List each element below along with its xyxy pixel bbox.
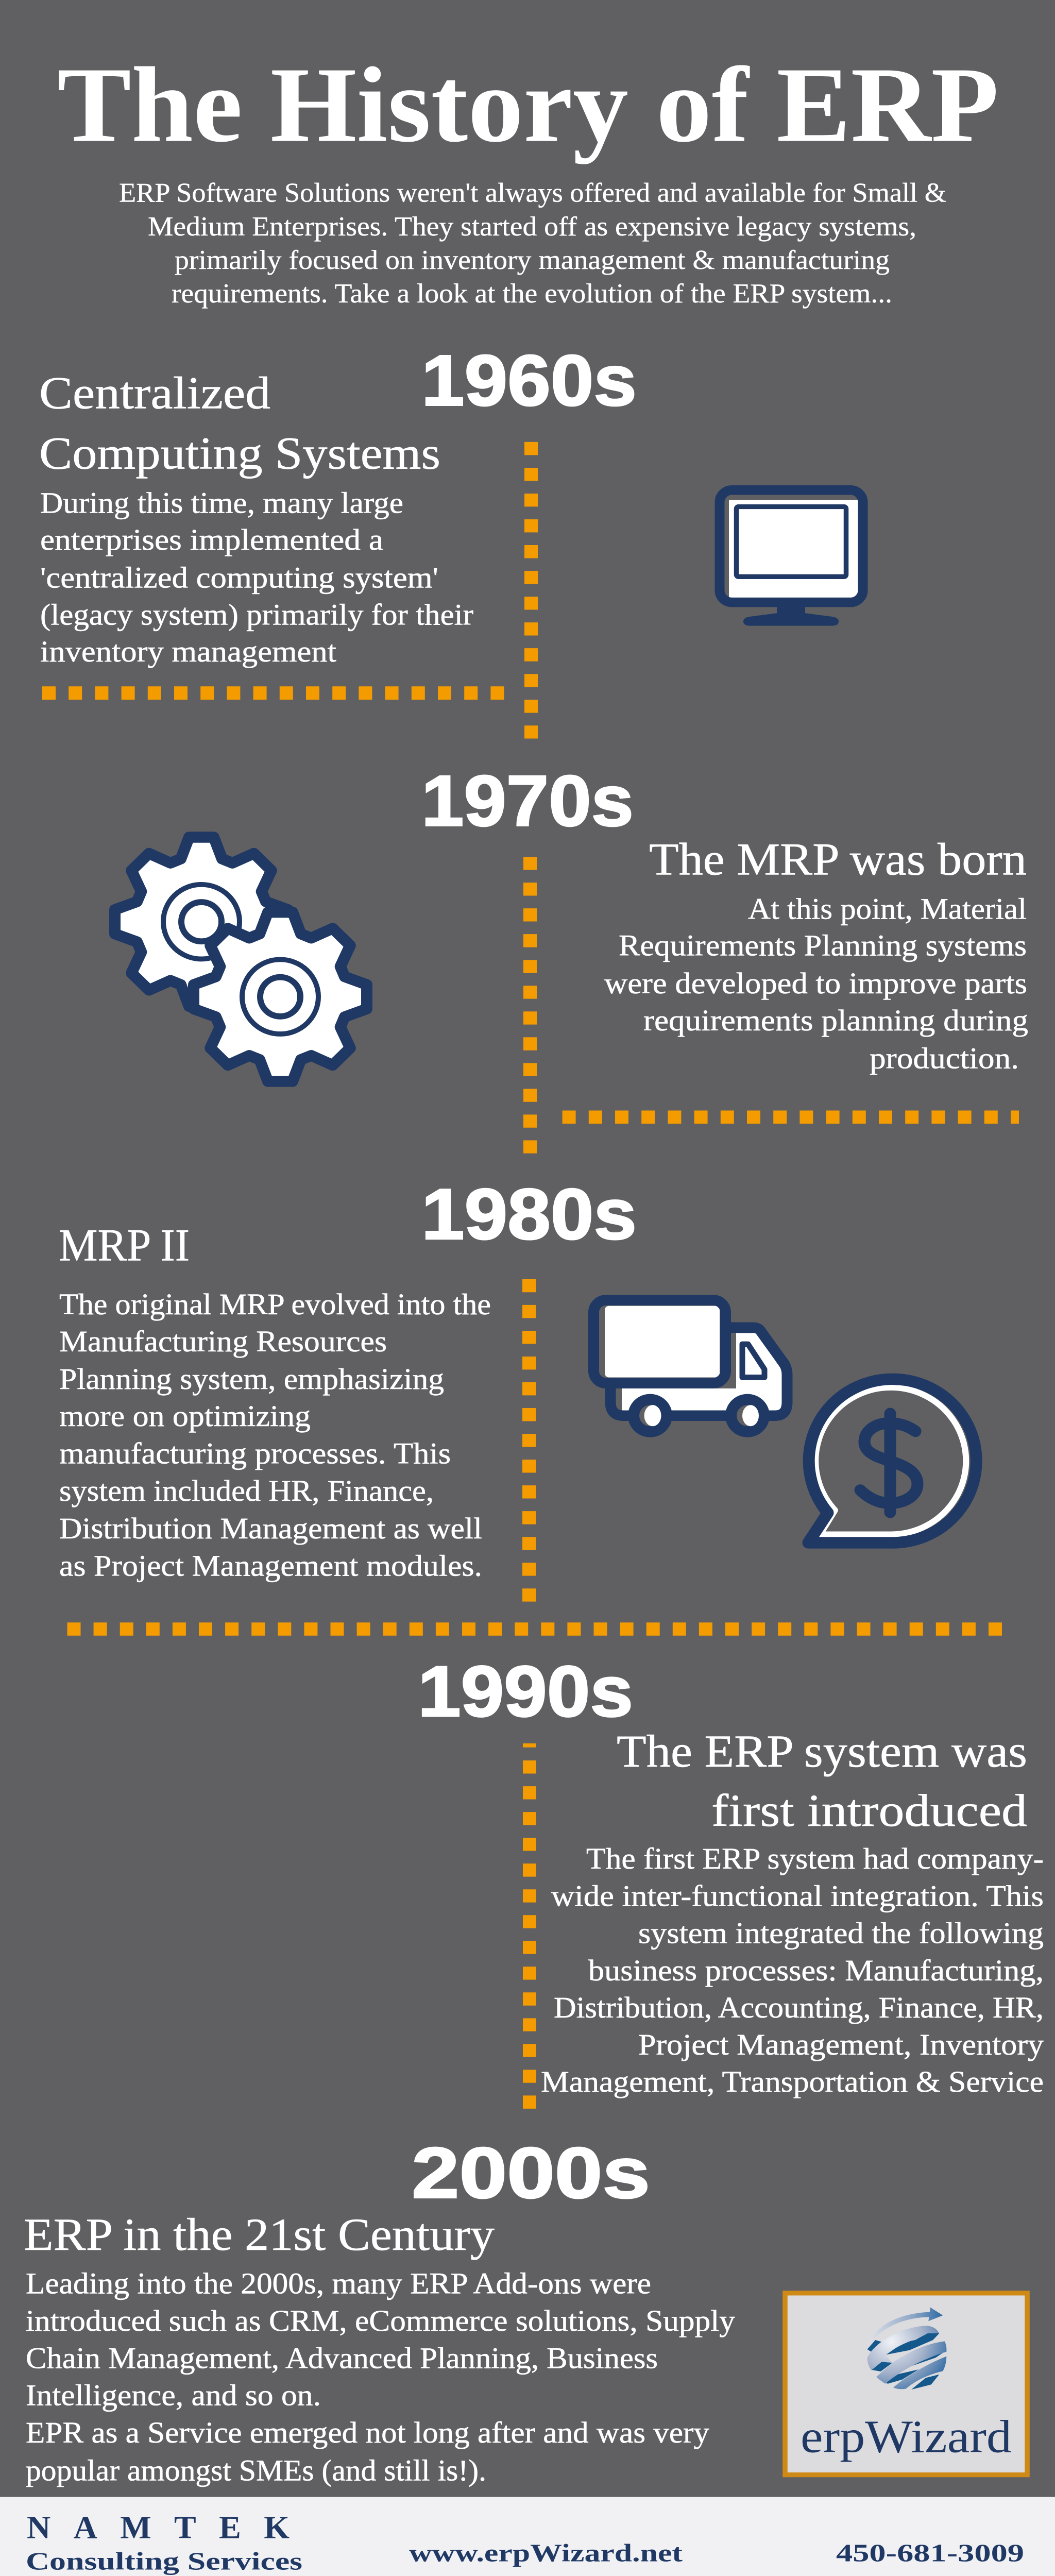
body text: 2000s: EPR as a Service emerged not long after and was very [26, 2416, 709, 2449]
footer bar [0, 2497, 1055, 2576]
dotted timeline: 1980s vertical [522, 1279, 536, 1602]
title: The History of ERP [57, 45, 999, 164]
heading: Centralized Computing Systems: Computing Systems [39, 429, 440, 479]
body text: 1980s: as Project Management modules. [59, 1549, 482, 1582]
intro text block: primarily focused on inventory management & manufacturing [175, 244, 890, 275]
heading: Centralized Computing Systems [39, 368, 440, 479]
body text: 1970s: were developed to improve parts [604, 967, 1027, 1000]
body text: 1980s: Manufacturing Resources [59, 1325, 387, 1358]
dotted timeline: 1960s vertical [524, 442, 538, 738]
body text: 1970s: Requirements Planning systems [619, 928, 1027, 962]
footer: website: www.erpWizard.net [409, 2539, 683, 2567]
body text: 1960s: enterprises implemented a [40, 523, 383, 556]
body text: 1970s [604, 892, 1028, 1075]
body text: 1970s: production. [870, 1041, 1019, 1075]
body text: 1980s: manufacturing processes. This [59, 1436, 451, 1470]
body text: 1990s: Management, Transportation & Service [541, 2065, 1044, 2098]
body text: 1990s: business processes: Manufacturing, [588, 1954, 1044, 1987]
body text: 2000s [26, 2266, 735, 2487]
body text: 1980s: more on optimizing [59, 1399, 311, 1433]
dotted divider: 1980s horizontal [67, 1622, 1002, 1636]
body text: 2000s: Leading into the 2000s, many ERP Add-ons were [26, 2266, 651, 2300]
body text: 1960s: During this time, many large [40, 486, 403, 520]
heading: The MRP was born: The MRP was born [649, 834, 1027, 885]
body text: 1970s: requirements planning during [643, 1004, 1028, 1037]
body text: 1980s: Planning system, emphasizing [59, 1362, 444, 1396]
body text: 2000s: Intelligence, and so on. [26, 2378, 321, 2412]
footer: tagline: Consulting Services [26, 2547, 302, 2575]
body text: 1980s [59, 1287, 491, 1582]
body text: 1990s: Project Management, Inventory [638, 2028, 1044, 2061]
body text: 2000s: introduced such as CRM, eCommerce solutions, Supply [26, 2304, 735, 2337]
body text: 1990s: system integrated the following [638, 1916, 1044, 1950]
intro text block: ERP Software Solutions weren't always offered and available for Small & [119, 177, 946, 208]
year heading: 2000s: 2000s [412, 2132, 650, 2213]
body text: 1960s: inventory management [40, 635, 337, 668]
logo box: erpWizard [785, 2293, 1027, 2475]
footer: phone: 450-681-3009 [836, 2539, 1024, 2567]
body text: 2000s: popular amongst SMEs (and still is!). [26, 2453, 486, 2487]
icon: computer monitor [720, 490, 863, 626]
heading: Centralized Computing Systems: Centralized [39, 368, 270, 418]
body text: 1990s: The first ERP system had company- [586, 1842, 1044, 1875]
heading: MRP II: MRP II [59, 1221, 190, 1271]
panel: 1970s [115, 760, 1028, 1154]
dotted timeline: 1990s vertical [523, 1743, 536, 2109]
heading: The ERP system was first introduced: The ERP system was [617, 1726, 1027, 1777]
intro text block [119, 177, 946, 309]
dotted divider: 1960s horizontal [42, 686, 504, 700]
body text: 1970s: At this point, Material [748, 892, 1027, 925]
year heading: 1960s: 1960s [421, 340, 637, 420]
icon: striped globe with arrow [867, 2308, 946, 2389]
body text: 1980s: Distribution Management as well [59, 1512, 482, 1545]
dotted divider: 1970s horizontal [563, 1110, 1019, 1124]
body text: 1980s: The original MRP evolved into the [59, 1287, 491, 1321]
icon: delivery truck [593, 1300, 787, 1437]
heading: The ERP system was first introduced [617, 1726, 1027, 1836]
panel: 1990s [418, 1651, 1044, 2109]
heading: The ERP system was first introduced: first introduced [711, 1786, 1027, 1836]
body text: 1990s [541, 1842, 1044, 2098]
intro text block: requirements. Take a look at the evolution of the ERP system... [172, 278, 892, 309]
body text: 1960s [40, 486, 473, 668]
panel: 2000s [24, 2132, 1027, 2487]
body text: 1980s: system included HR, Finance, [59, 1473, 434, 1507]
body text: 1960s: (legacy system) primarily for their [40, 598, 473, 631]
body text: 1960s: 'centralized computing system' [40, 561, 438, 594]
panel: 1960s [39, 340, 863, 738]
body text: 1990s: wide inter-functional integration. This [551, 1879, 1044, 1912]
icon: dollar speech bubble [808, 1379, 976, 1543]
heading: ERP in the 21st Century: ERP in the 21st Century [24, 2210, 495, 2260]
year heading: 1970s: 1970s [421, 760, 634, 841]
logo wordmark: erpWizard [801, 2411, 1012, 2462]
year heading: 1980s: 1980s [421, 1174, 637, 1254]
footer: company name: NAMTEK [27, 2510, 290, 2546]
year heading: 1990s: 1990s [418, 1651, 633, 1732]
icon: gears [115, 837, 369, 1084]
body text: 1990s: Distribution, Accounting, Finance, HR, [554, 1991, 1044, 2024]
panel: 1980s [59, 1174, 1002, 1629]
intro text block: Medium Enterprises. They started off as expensive legacy systems, [148, 211, 916, 242]
dotted timeline: 1970s vertical [523, 857, 537, 1154]
body text: 2000s: Chain Management, Advanced Planning, Business [26, 2341, 658, 2375]
